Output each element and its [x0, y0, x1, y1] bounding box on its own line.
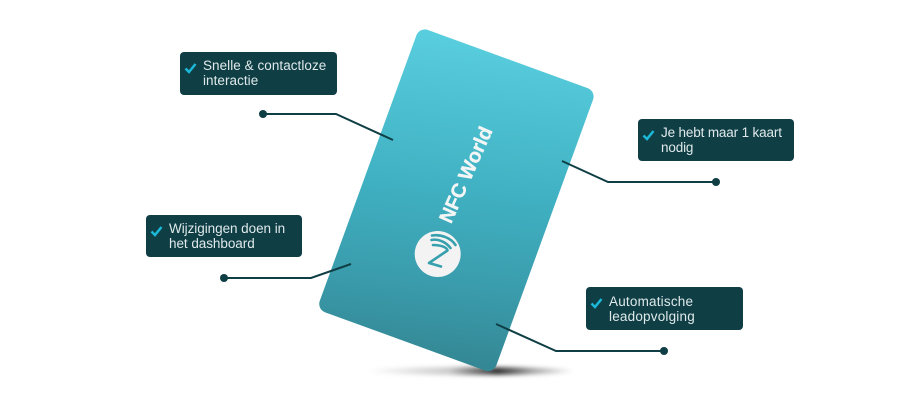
- connector line: dashboard: [220, 264, 351, 282]
- callout: one card: [638, 119, 794, 161]
- callout: dashboard changes: Wijzigingen doen in: [169, 221, 285, 236]
- callout: dashboard changes: het dashboard: [169, 236, 255, 251]
- callout: contactless interaction: Snelle & contactloze: [203, 58, 326, 73]
- callout: one card: Je hebt maar 1 kaart: [661, 125, 782, 140]
- callout: automatic lead follow-up: leadopvolging: [609, 309, 695, 324]
- card shadow: [365, 367, 575, 375]
- callout: contactless interaction: [180, 52, 337, 95]
- icon: NFC logo: [415, 231, 461, 277]
- connector line: one card: [562, 161, 720, 186]
- card brand name: NFC World: [436, 123, 497, 227]
- callout: automatic lead follow-up: Automatische: [609, 294, 693, 309]
- callout: dashboard changes: [146, 215, 302, 257]
- connector line: contactless: [259, 110, 393, 140]
- NFC card: [317, 27, 596, 374]
- callout: automatic lead follow-up: [586, 287, 743, 330]
- connector line: lead follow-up: [496, 324, 668, 355]
- callout: contactless interaction: interactie: [203, 73, 258, 88]
- callout: one card: nodig: [661, 140, 693, 155]
